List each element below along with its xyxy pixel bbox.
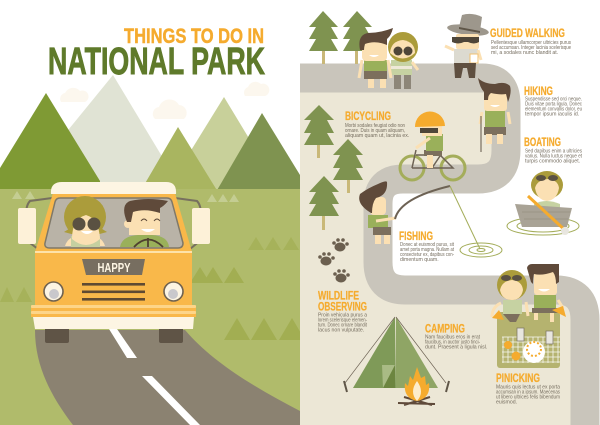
body (35, 193, 192, 306)
picnicking text: PINICKING (496, 371, 540, 385)
bicycling text: Morbi sodales feugiat odio non (345, 123, 405, 129)
trees (304, 11, 372, 230)
title (48, 25, 265, 83)
wildlife observing text: lacus non vulputate. (318, 328, 364, 334)
bicycling text: BICYCLING (345, 109, 391, 123)
couple walking (359, 28, 418, 89)
hiking text: tempor ipsum iaculis id. (525, 112, 579, 118)
paw prints (318, 238, 350, 282)
wildlife observing text: lorem scelerisque elemen- (318, 318, 367, 324)
road (35, 330, 300, 425)
clouds (60, 82, 269, 119)
guided walking text: sed accumsan. Integer lacinia scelerisque (491, 45, 571, 51)
fishing text (399, 229, 454, 263)
picnic couple (492, 264, 566, 322)
fishing text: consectetur ex, dapibus con- (400, 252, 454, 258)
fishing line and ripples (450, 186, 502, 257)
boy driver (120, 199, 169, 247)
bicycling text: aliquam quam ut, lacinia ex. (345, 133, 409, 139)
picnicking text (496, 371, 560, 406)
picnicking text: accumsan in a ipsum. Maecenas (496, 390, 560, 396)
camping text (425, 322, 487, 350)
hiking text: elementum convallis dolor, eu (525, 106, 582, 112)
fishing text: dimentum quam. (400, 257, 439, 263)
winding path (300, 78, 585, 425)
bicycling text (345, 109, 409, 139)
title: THINGS TO DO IN (124, 25, 264, 48)
guided walking text: Pellentesque ullamcorper ultricies purus (491, 40, 571, 46)
boating text: varius. Nulla luctus neque et (525, 154, 582, 160)
hiking text (524, 84, 582, 118)
plate and food (523, 341, 545, 363)
guided walking text (490, 26, 571, 56)
fisherman (359, 181, 450, 244)
wildlife observing text: tum. Donec ornare blandit (318, 322, 367, 328)
grille (82, 283, 145, 301)
boating text: turpis commodo aliquet. (525, 158, 580, 164)
guided walking text: GUIDED WALKING (490, 26, 565, 40)
camping text: Nam faucibus eros in erat (425, 334, 481, 340)
bumper (31, 305, 196, 329)
campfire (398, 367, 435, 405)
road dashes (109, 329, 200, 425)
picnicking text: Mauris quis lectus ut ex porta (496, 384, 560, 390)
title: NATIONAL PARK (48, 41, 265, 83)
tent (344, 317, 449, 392)
windshield (45, 198, 183, 248)
hiking text: Duis vitae porta ligula. Donec (525, 102, 582, 108)
number plate: HAPPY (98, 260, 131, 275)
wildlife observing text: WILDLIFE (318, 288, 359, 302)
picnicking text: euismod. (496, 400, 517, 406)
boating text (524, 135, 582, 164)
wildlife observing text: OBSERVING (318, 300, 367, 314)
camping text: faucibus, in auctor justo tinci- (425, 340, 480, 346)
bicycle rider (400, 111, 465, 180)
bicycling text: ornare. Duis in quam aliquam, (345, 128, 405, 134)
checkered cloth (502, 337, 560, 363)
hiking text: HIKING (524, 84, 553, 98)
ground (0, 189, 300, 425)
girl passenger (64, 196, 107, 247)
wheels (45, 325, 183, 343)
number plate (82, 259, 145, 275)
picnic mat (497, 312, 560, 368)
picnicking text: ut libero ultrices felis bibendum (496, 394, 560, 400)
boating text: Sed dapibus enim a ultricies (525, 148, 582, 154)
right page background (300, 78, 585, 425)
wildlife observing text: Proin vehicula purus a (318, 312, 367, 318)
hiking text: Suspendisse sed orci neque. (525, 96, 582, 102)
small hill triangles (0, 191, 305, 340)
hiker (478, 78, 511, 152)
windshield ledge (35, 251, 192, 253)
fishing text: FISHING (399, 229, 433, 243)
fishing text: Donec at euismod purus, sit (400, 242, 454, 248)
mirrors (18, 198, 210, 249)
wildlife observing text (318, 288, 367, 334)
ranger guide (445, 14, 489, 78)
van (18, 182, 210, 343)
guided walking text: mi, a sodales nunc blandit at. (491, 50, 558, 56)
mountains (0, 75, 300, 195)
headlights (44, 282, 183, 301)
boating girl (507, 171, 579, 235)
boating text: BOATING (524, 135, 561, 149)
camping text: dunt. Praesent a ligula nisl. (425, 344, 487, 350)
fishing text: amet porta magna. Nullam at (400, 247, 454, 253)
roof (51, 182, 176, 194)
camping text: CAMPING (425, 322, 465, 336)
